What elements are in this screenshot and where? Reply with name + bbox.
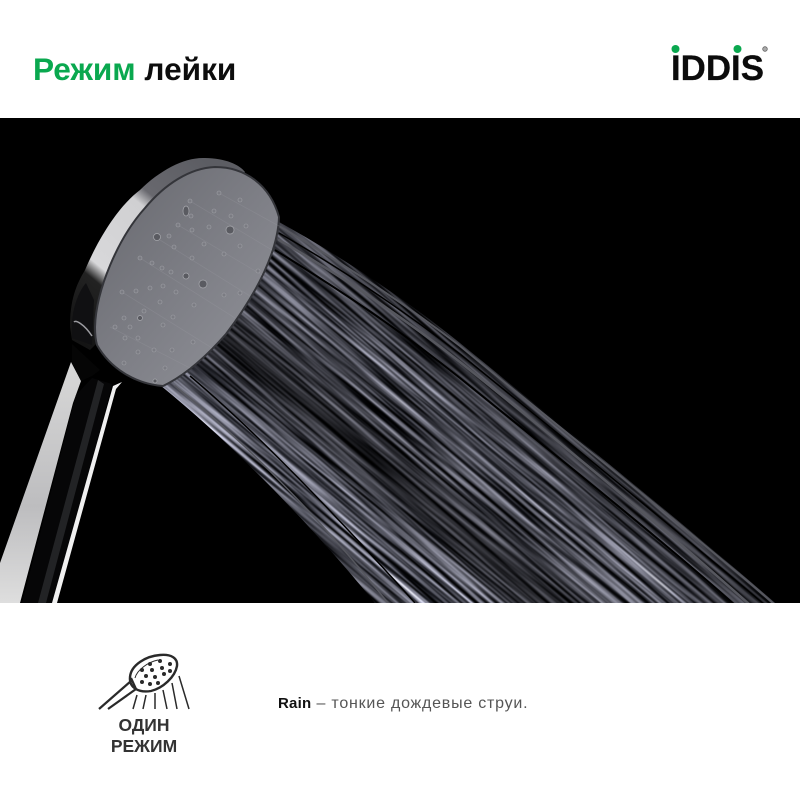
icon label: ОДИН xyxy=(118,715,170,735)
head xyxy=(130,655,177,691)
face streaks xyxy=(110,193,279,368)
shower head face xyxy=(95,167,279,386)
title: Режим лейки xyxy=(33,51,236,87)
photo: shower head with rain water xyxy=(0,118,800,603)
shower head rim xyxy=(70,158,245,350)
water droplets xyxy=(138,206,234,383)
icon: shower head, one mode xyxy=(98,654,190,710)
handle xyxy=(99,678,136,709)
description: Rain – тонкие дождевые струи. xyxy=(278,695,528,712)
rim dark edge xyxy=(72,283,94,345)
icon label: РЕЖИМ xyxy=(111,736,177,756)
nozzles xyxy=(140,659,172,686)
water jets xyxy=(133,676,189,709)
nozzles xyxy=(113,191,260,370)
icon label xyxy=(111,715,177,756)
shower handle xyxy=(0,344,122,603)
water streams xyxy=(162,222,775,603)
